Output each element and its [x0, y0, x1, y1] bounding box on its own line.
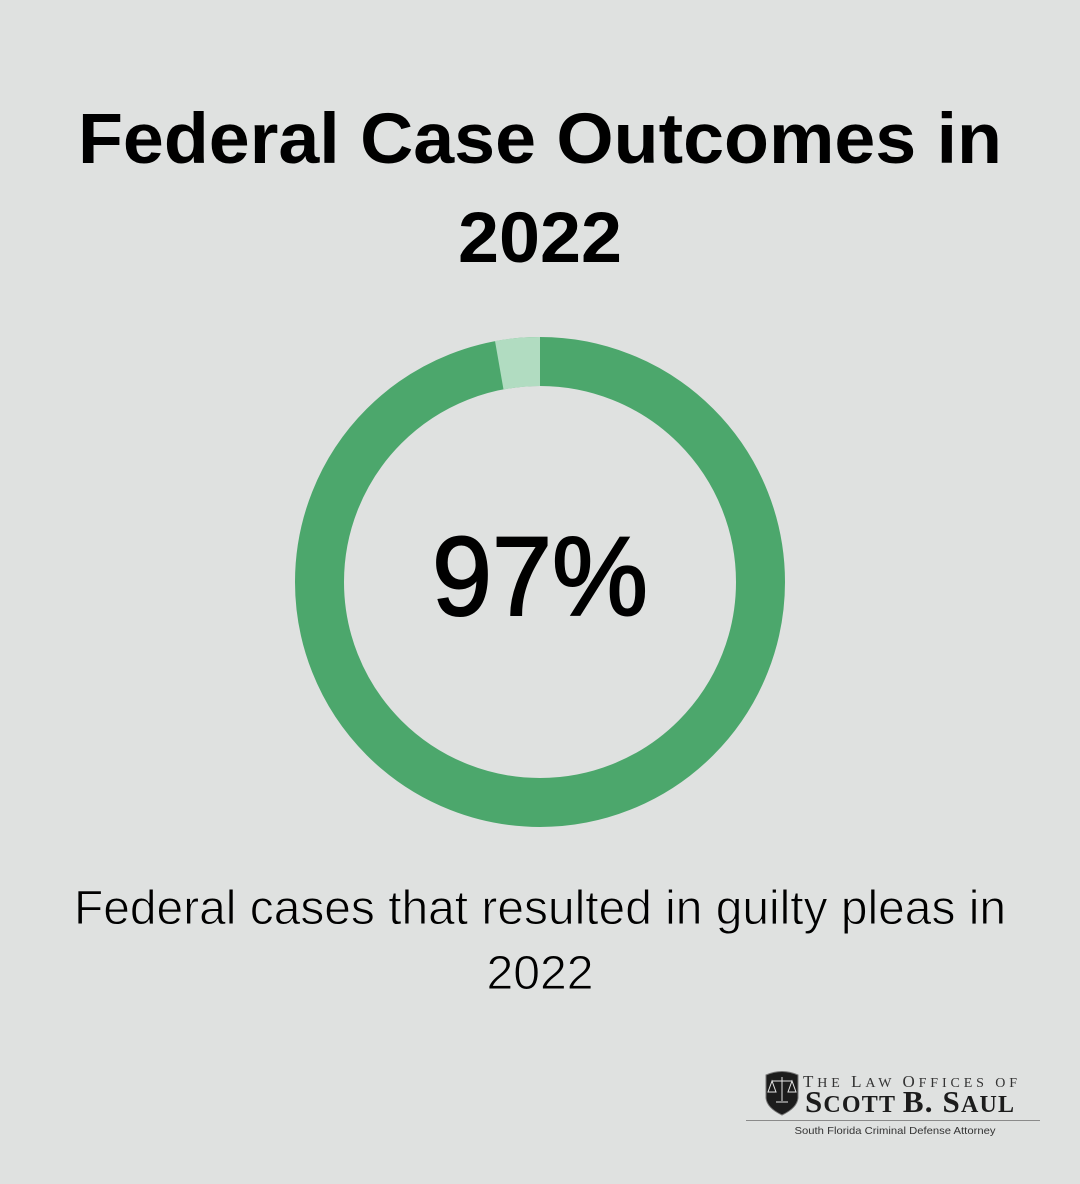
- center value: 97%: 97%: [432, 514, 648, 639]
- firm name line 1: T HE L AW O FFICES OF: [803, 1072, 1017, 1091]
- light segment: remaining 3%: [495, 337, 540, 390]
- icon: shield with scales: [766, 1072, 798, 1115]
- title: 2022: [458, 199, 622, 278]
- logo: The Law Offices of Scott B. Saul: [746, 1072, 1040, 1137]
- caption: 2022: [486, 947, 594, 1000]
- caption: [74, 882, 1006, 1000]
- firm name line 2: SCOTT B. SAUL: [805, 1084, 1014, 1119]
- tagline: South Florida Criminal Defense Attorney: [794, 1125, 996, 1137]
- title: Federal Case Outcomes in: [78, 100, 1002, 179]
- donut chart: [320, 337, 760, 802]
- caption: Federal cases that resulted in guilty pleas in: [74, 882, 1006, 935]
- title: [78, 100, 1002, 278]
